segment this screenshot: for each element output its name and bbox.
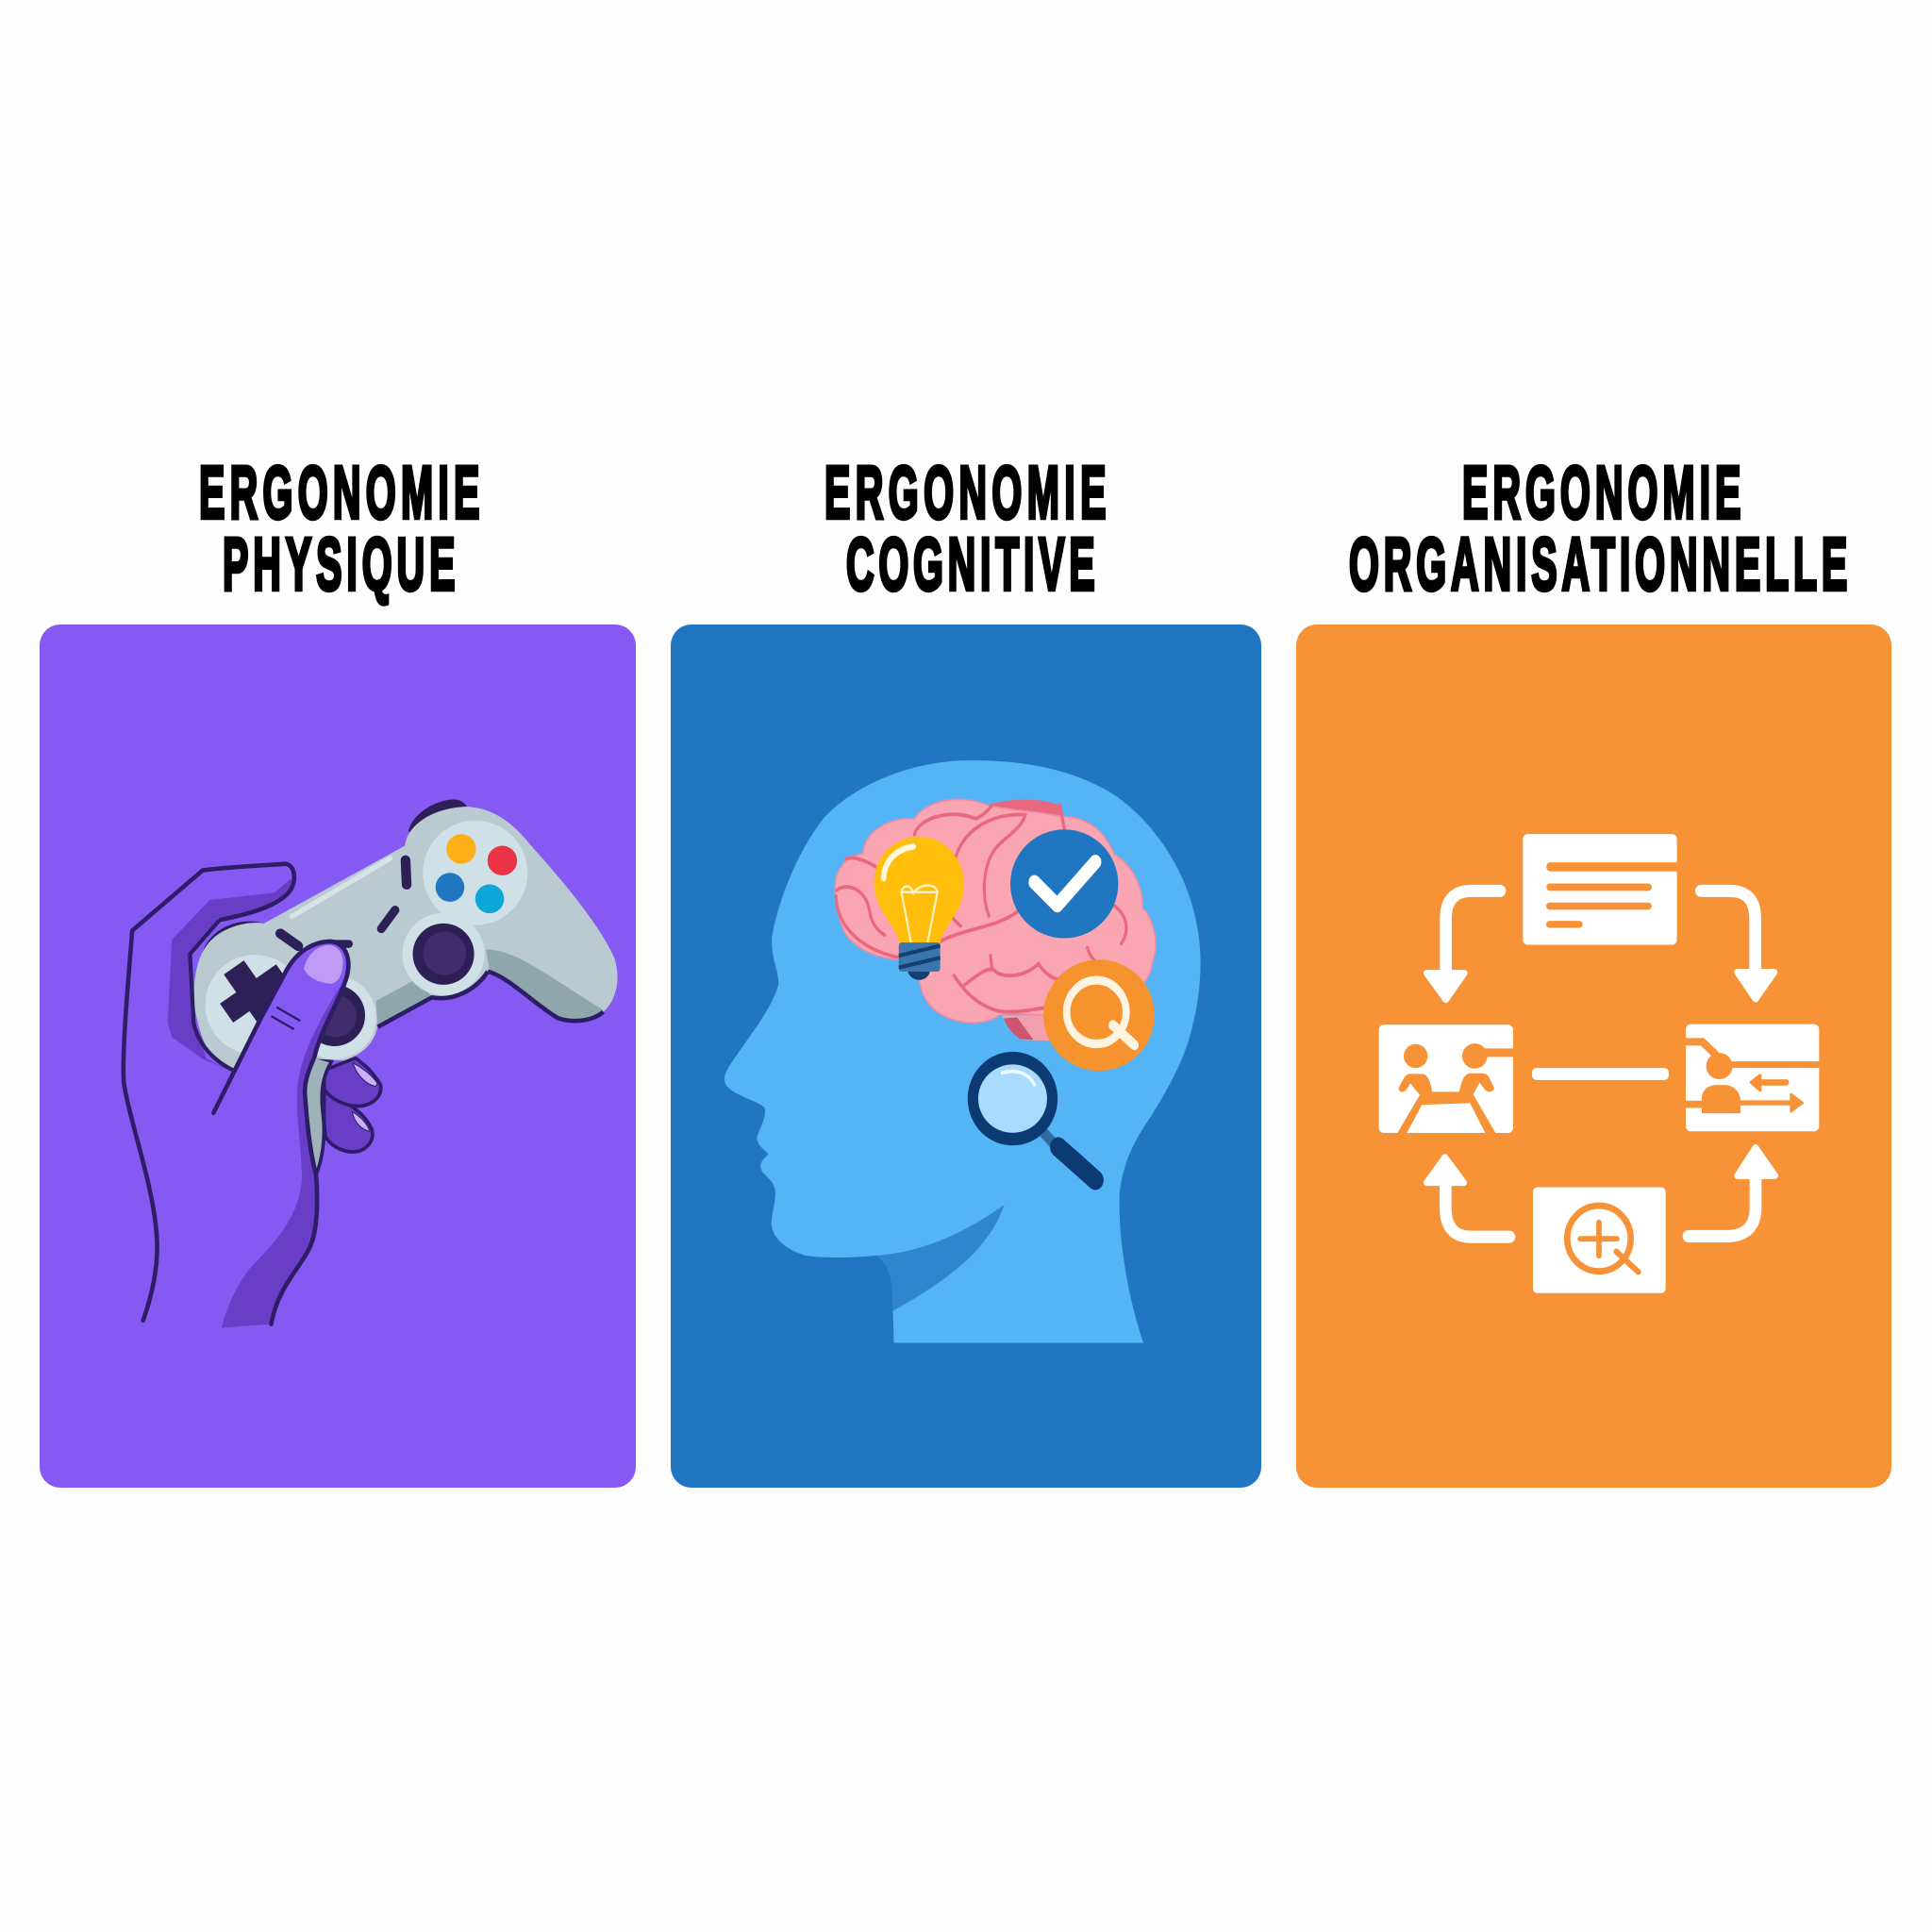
controller bottom outline — [377, 972, 604, 1027]
analysis card — [1533, 1187, 1666, 1293]
heading: ergonomie organisationnelle — [1349, 452, 1847, 607]
connector bar — [1532, 1068, 1669, 1080]
small center buttons — [280, 860, 407, 946]
brain sulci — [836, 805, 1126, 1012]
icon: orange search badge — [1043, 959, 1155, 1071]
thumb shading — [222, 975, 347, 1327]
d-pad base — [205, 955, 305, 1055]
heading: ergonomie cognitive — [824, 452, 1106, 607]
cyan button — [475, 884, 504, 913]
controller body — [194, 807, 618, 1070]
brain top fold — [989, 800, 1065, 824]
panel: cognitive ergonomics — [671, 625, 1261, 1488]
cerebellum — [1002, 1015, 1054, 1041]
heading: ergonomie physique: PHYSIQUE — [223, 524, 455, 607]
panel: physical ergonomics — [40, 625, 636, 1488]
face button pad — [423, 821, 527, 925]
orange card background — [1296, 625, 1891, 1488]
yellow button — [446, 834, 476, 864]
blue card background — [671, 625, 1261, 1488]
red button — [488, 846, 517, 875]
illustration: head with brain and icons — [724, 760, 1201, 1342]
right thumbstick — [402, 913, 485, 995]
neck shadow — [876, 1205, 1005, 1311]
team card — [1379, 1024, 1514, 1134]
left thumbstick — [292, 975, 376, 1059]
finger inner outline — [190, 921, 233, 1071]
illustration: hand holding game controller — [124, 800, 618, 1327]
d-pad cross — [208, 946, 301, 1040]
arrow: top right — [1701, 891, 1774, 999]
purple card background — [40, 625, 636, 1488]
back bumper left — [203, 922, 264, 952]
head silhouette — [724, 760, 1201, 1342]
top highlight — [291, 858, 391, 917]
lower fingers behind the controller — [305, 1057, 381, 1174]
workflow card — [1686, 1024, 1820, 1131]
arrow: top left — [1426, 891, 1500, 1000]
blue button — [436, 873, 464, 902]
icon: light bulb — [874, 837, 964, 980]
panel: organisational ergonomics — [1296, 625, 1891, 1488]
icon: magnifying glass — [973, 1058, 1095, 1180]
palm and back of hand outline — [124, 864, 294, 1321]
document card — [1523, 834, 1683, 945]
heading: ergonomie cognitive: COGNITIVE — [846, 524, 1095, 607]
heading: ergonomie physique — [199, 452, 479, 607]
thumb creases — [272, 1008, 300, 1029]
arrow: bottom right — [1689, 1147, 1775, 1236]
thumb nail — [304, 945, 343, 984]
illustration: process cycle — [1379, 834, 1820, 1293]
thumb and palm fill — [130, 941, 348, 1326]
arrow: bottom left — [1426, 1158, 1509, 1237]
heading: ergonomie organisationnelle: ORGANISATIONNELLE — [1349, 524, 1847, 607]
heading: ergonomie physique: ERGONOMIE — [199, 452, 479, 535]
thumb outline — [213, 941, 348, 1324]
back bumper right — [408, 800, 468, 839]
back finger shaded strip — [168, 878, 291, 1072]
heading: ergonomie cognitive: ERGONOMIE — [824, 452, 1106, 535]
icon: check badge — [1010, 829, 1118, 939]
brain — [835, 799, 1156, 1023]
heading: ergonomie organisationnelle: ERGONOMIE — [1462, 452, 1740, 535]
controller underside shading — [376, 949, 604, 1027]
